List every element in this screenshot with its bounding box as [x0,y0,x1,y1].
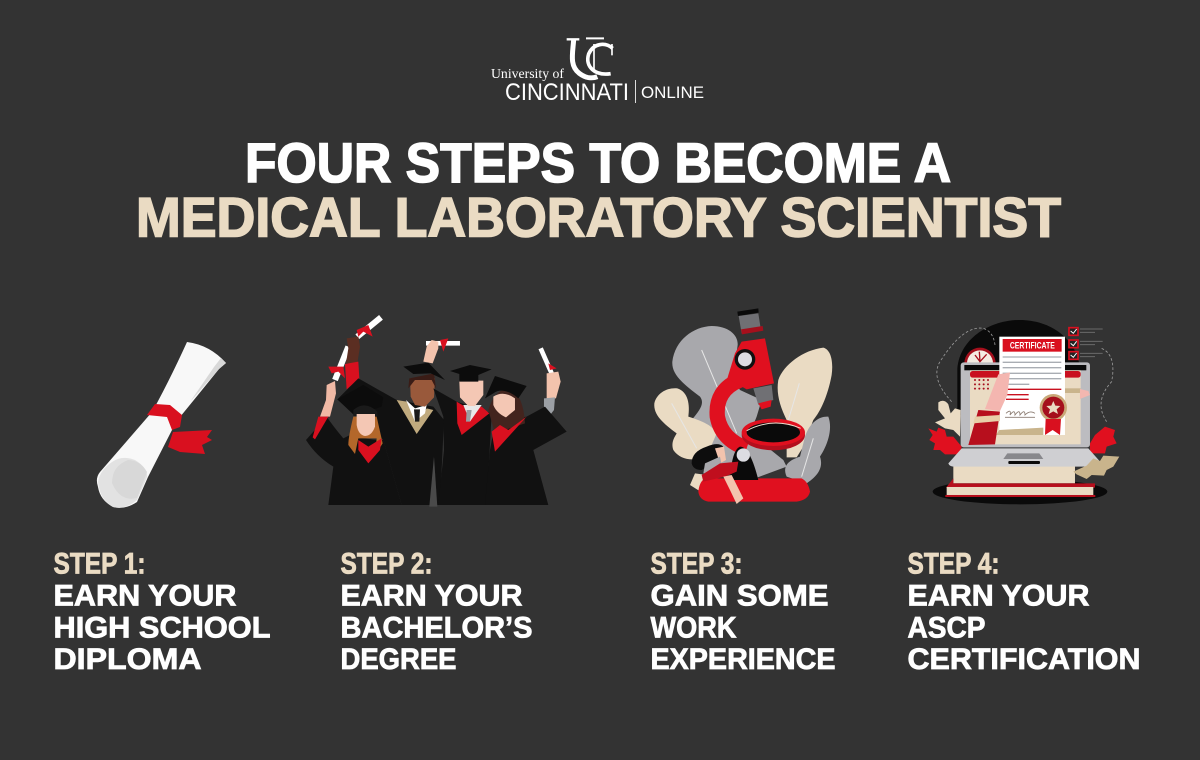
step 4 text: EARN YOUR [908,579,1090,612]
leaf veins [672,350,813,477]
leaves [672,326,787,478]
step 3 text: GAIN SOME [650,579,828,612]
person 3 [423,340,438,363]
checklist [1069,328,1078,359]
stage [742,420,805,450]
step 1 text [54,548,270,676]
icon: microscope with woman [654,308,832,504]
badge [1040,394,1067,421]
logo: University of Cincinnati Online: ONLINE [641,83,704,102]
dashed paths [937,328,1113,422]
laptop screen [961,362,1090,447]
step 3 text: WORK [650,611,737,644]
icon: diploma scroll [97,342,226,508]
step 4 text: CERTIFICATION [908,643,1140,676]
step 4 text: STEP 4: [908,548,1000,581]
step 2 text [340,548,532,676]
step 1 text: EARN YOUR [54,579,237,612]
woman [692,444,723,470]
hand [968,410,1000,445]
icon: laptop with certificate on books [928,320,1119,504]
person 4 [547,372,561,398]
step 1 text: DIPLOMA [54,643,202,676]
step 3 text [650,548,836,676]
step 3 text: STEP 3: [650,548,742,581]
title: MEDICAL LABORATORY SCIENTIST [136,186,1061,248]
person 1 [320,381,336,417]
logo: University of Cincinnati Online: University of [491,66,565,81]
laptop base [948,448,1102,467]
step 3 text: EXPERIENCE [650,643,836,676]
certificate [999,337,1065,435]
step 1 text: STEP 1: [54,548,146,581]
logo: University of Cincinnati Online: CINCINNATI [505,79,629,106]
step 4 text [908,548,1140,676]
person 2 gown [346,337,360,363]
title [136,131,1061,248]
step 2 text: BACHELOR’S [340,611,532,644]
base [698,478,810,502]
icon: laptop with certificate on books: CERTIFICATE [1010,340,1055,350]
microscope arm [717,380,747,448]
step 2 text: EARN YOUR [340,579,523,612]
logo: University of Cincinnati Online [491,38,704,106]
step 2 text: STEP 2: [340,548,432,581]
icon: four graduates [306,317,567,507]
clock [964,348,996,379]
step 4 text: ASCP [908,611,986,644]
gap between gowns [429,457,437,507]
books [953,465,1075,483]
step 1 text: HIGH SCHOOL [54,611,270,644]
scrolls [335,317,552,380]
step 2 text: DEGREE [340,643,456,676]
leaves [928,428,962,454]
title: FOUR STEPS TO BECOME A [245,131,951,194]
